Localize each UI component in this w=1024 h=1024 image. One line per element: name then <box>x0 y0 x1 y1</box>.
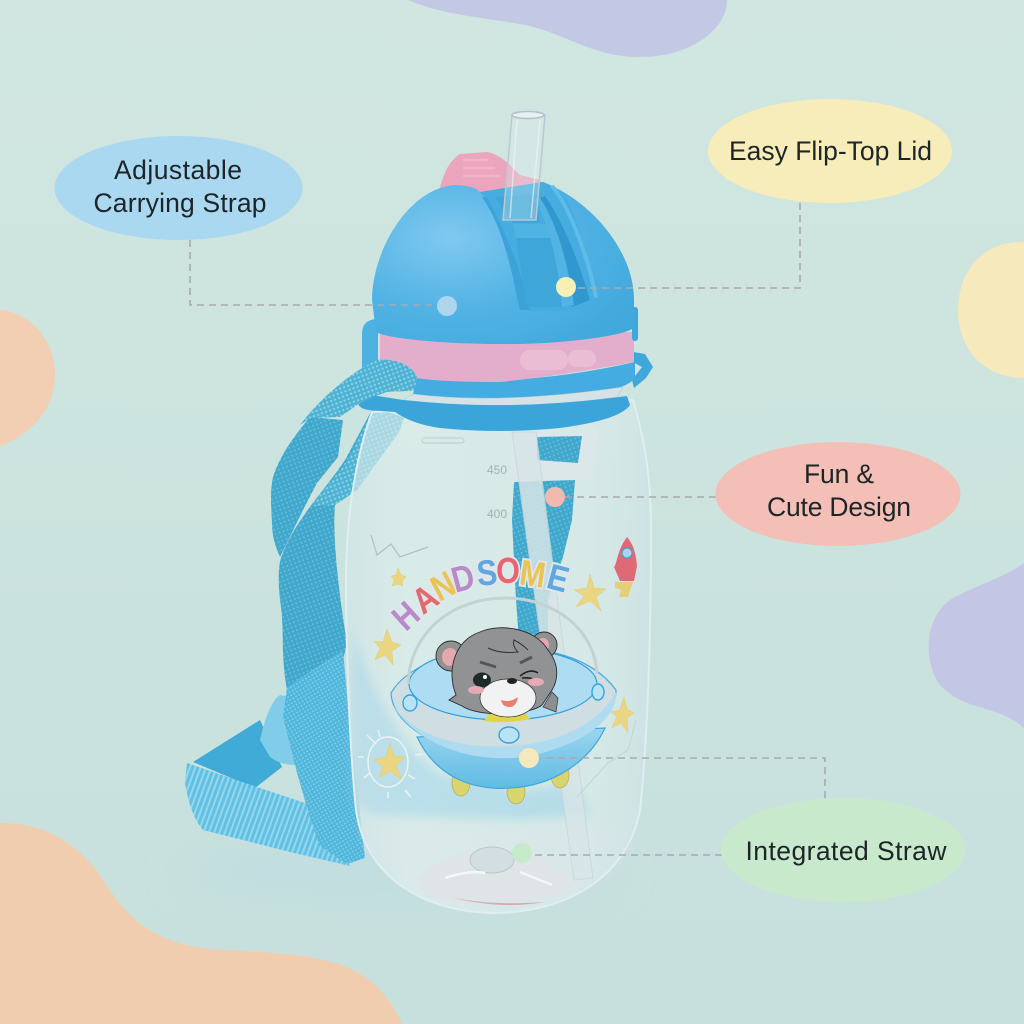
bear <box>436 628 558 722</box>
right rib <box>535 198 574 307</box>
strap pom <box>260 695 296 765</box>
bear ears <box>436 632 557 671</box>
connector: strap <box>190 240 437 305</box>
straps seen through bottle <box>352 625 590 820</box>
label: easy flip-top lid: Easy Flip-Top Lid <box>729 136 932 166</box>
pink band <box>380 332 634 382</box>
ufo rim lower band <box>393 692 616 758</box>
right groove <box>540 196 590 307</box>
connector: integrated straw <box>533 854 722 856</box>
glass gap <box>403 387 623 405</box>
label: easy flip-top lid <box>708 99 952 203</box>
connector: fun design <box>565 496 716 498</box>
strap: wide lower band <box>283 650 365 864</box>
word: HANDSOME: A <box>405 577 446 622</box>
label: fun and cute design: Fun & <box>804 459 874 489</box>
ufo opening <box>409 648 597 720</box>
bear muzzle <box>480 679 536 717</box>
blue ring <box>413 362 635 401</box>
ufo bowl <box>417 728 605 788</box>
channel left rib <box>482 197 530 310</box>
bear paw <box>543 692 558 712</box>
center block top <box>513 224 556 238</box>
blob: right purple <box>929 563 1024 728</box>
lid right lug <box>632 352 653 388</box>
strap inner dark side <box>193 720 282 788</box>
body shell <box>346 400 651 913</box>
marker: straw dot <box>512 843 532 863</box>
strap: lower loop <box>185 695 350 866</box>
word: HANDSOME: N <box>425 564 463 610</box>
outer rim highlight <box>552 186 596 298</box>
lid left handle <box>362 319 386 380</box>
word: HANDSOME: E <box>543 557 573 601</box>
marker: design dot <box>545 487 565 507</box>
ufo rim <box>391 648 616 750</box>
constellation lines <box>371 535 636 797</box>
spout channel <box>480 182 597 311</box>
connector: lid <box>577 203 800 288</box>
bear mouth <box>501 678 518 707</box>
bear cheeks <box>468 678 544 694</box>
strap: top loop over flange <box>300 360 417 425</box>
flip tab <box>440 152 543 196</box>
strap flat strip <box>185 763 350 866</box>
lower interior <box>362 825 636 911</box>
straw pit <box>495 194 540 223</box>
strap: descending band <box>279 408 403 690</box>
label: fun and cute design: Cute Design <box>767 492 911 522</box>
word: HANDSOME: M <box>517 553 548 596</box>
rocket <box>614 537 637 597</box>
ufo graphic <box>391 598 616 804</box>
base <box>417 847 573 905</box>
stars <box>374 568 634 780</box>
label: adjustable carrying strap <box>54 136 302 240</box>
word: HANDSOME: S <box>475 553 499 594</box>
word: HANDSOME: H <box>385 594 428 639</box>
strap: back band <box>271 417 343 557</box>
word: HANDSOME: D <box>447 557 479 601</box>
spout inner <box>482 186 596 310</box>
bear head <box>449 628 557 714</box>
bottle body <box>346 400 651 913</box>
bear hair <box>488 640 528 652</box>
word: HANDSOME <box>385 552 573 639</box>
blob: bottom left peach <box>0 823 402 1024</box>
word: HANDSOME: O <box>496 552 520 592</box>
strap tab through bottle <box>510 430 600 480</box>
ufo portholes <box>403 684 604 743</box>
blob: left peach <box>0 310 55 446</box>
lower flange <box>358 395 630 431</box>
strap: light crossing section <box>312 410 404 506</box>
inner straw <box>512 432 593 880</box>
straw top <box>503 112 545 220</box>
sun outline <box>358 730 423 798</box>
pink band ridges <box>520 350 596 370</box>
marker: strap dot <box>437 296 457 316</box>
blob: right yellow <box>958 242 1024 378</box>
bear shirt <box>484 710 530 722</box>
ufo feet <box>452 762 569 804</box>
rear strap through bottle <box>512 480 575 660</box>
blob: top purple <box>408 0 727 57</box>
glass dome <box>408 598 597 684</box>
label: integrated straw: Integrated Straw <box>746 836 947 866</box>
right small tab <box>632 307 638 341</box>
label: adjustable carrying strap: Carrying Strap <box>94 188 266 218</box>
marker: ufo dot <box>519 748 539 768</box>
connector: design to straw label <box>540 758 825 798</box>
marker: lid dot <box>556 277 576 297</box>
measure marks: 450 <box>487 463 507 477</box>
label: integrated straw <box>721 798 965 902</box>
measure marks: 400 <box>487 507 507 521</box>
measure marks <box>422 438 507 521</box>
label: fun and cute design <box>716 442 960 546</box>
label: adjustable carrying strap: Adjustable <box>114 155 242 185</box>
dome <box>372 182 634 344</box>
floor shadow <box>180 835 620 905</box>
center block <box>516 238 563 307</box>
lid <box>358 182 653 431</box>
bear eyes <box>473 657 538 688</box>
